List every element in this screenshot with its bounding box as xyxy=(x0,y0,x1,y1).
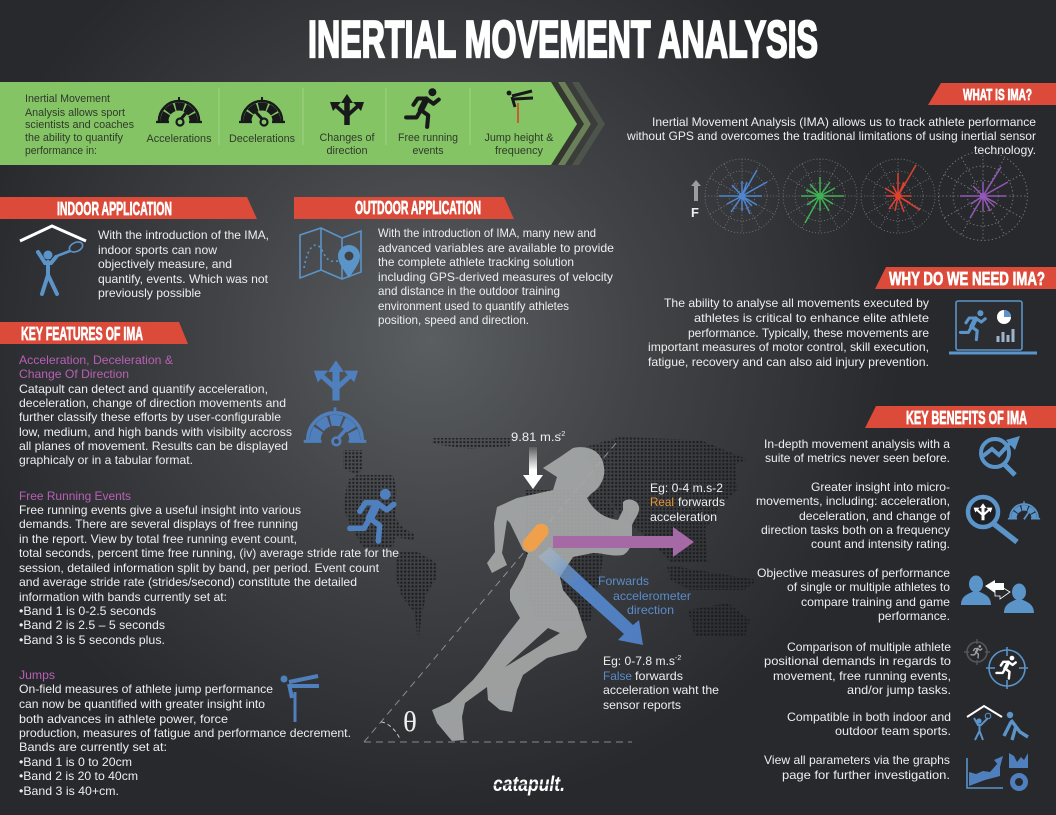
outdoor text: including GPS-derived measures of velocity xyxy=(378,270,613,284)
icon: indoor and outdoor sports xyxy=(967,706,1028,740)
banner intro text: scientists and coaches xyxy=(25,119,134,131)
benefit text: positional demands xyxy=(764,640,951,697)
false acceleration label: sensor reports xyxy=(603,698,681,712)
icon: indoor athlete xyxy=(20,226,86,294)
benefit text: movement analysis xyxy=(764,437,950,465)
outdoor text: and distance in the outdoor training xyxy=(378,284,560,298)
accelerometer direction label: accelerometer xyxy=(613,589,691,603)
banner labels: Free running xyxy=(398,132,458,144)
benefit text: micro-movements: direction tasks both on a frequency xyxy=(761,523,950,537)
icon: magnifier trend xyxy=(981,436,1020,475)
diagram: runner accelerometer xyxy=(364,430,725,742)
false acceleration label: False xyxy=(603,669,632,683)
feature: free running text: information with bands currently set at: xyxy=(19,590,227,604)
purple real acceleration arrow xyxy=(553,527,694,557)
icon: targets with runners xyxy=(964,639,1028,689)
indoor text: indoor sports can now xyxy=(98,243,217,257)
dividers xyxy=(219,88,470,145)
false acceleration label: acceleration waht the xyxy=(603,683,719,697)
benefit text: compatible: Compatible in both indoor and xyxy=(787,710,951,724)
benefit text: micro-movements: count and intensity rating. xyxy=(811,537,950,551)
banner intro text: Inertial Movement xyxy=(25,93,110,105)
benefit text: graphs: page for further investigation. xyxy=(782,768,950,782)
heading: indoor application xyxy=(0,197,257,219)
blue accelerometer arrow xyxy=(538,547,643,645)
chart: blue radar xyxy=(705,159,779,233)
banner labels: frequency xyxy=(495,145,543,157)
icon: change of direction arrows xyxy=(330,94,364,125)
chart: red radar xyxy=(861,159,935,233)
panel: key benefits xyxy=(756,406,1056,788)
heading: key features: KEY FEATURES OF IMA xyxy=(21,324,143,344)
benefit text: graphs xyxy=(764,753,950,782)
sensor xyxy=(520,521,552,555)
heading: what is IMA xyxy=(928,83,1056,105)
real acceleration label: acceleration xyxy=(650,510,717,524)
false acceleration label: forwards xyxy=(635,669,683,683)
panel: key features xyxy=(0,322,399,798)
indoor text xyxy=(98,228,269,300)
heading: indoor application: INDOOR APPLICATION xyxy=(57,199,172,219)
feature: acceleration text: Acceleration, Deceleration & xyxy=(19,353,173,367)
heading: outdoor application: OUTDOOR APPLICATION xyxy=(355,198,481,218)
why text: athletes is critical to enhance elite athlete xyxy=(694,311,929,325)
feature: acceleration text: further classify these efforts by user-configurable xyxy=(19,410,281,424)
why text xyxy=(648,296,929,369)
banner labels xyxy=(146,132,554,157)
benefit text: objective measures xyxy=(757,566,950,623)
feature: free running text: and average stride rate (strides/second) constitute the detailed xyxy=(19,575,357,589)
feature: jumps text: •Band 3 is 40+cm. xyxy=(19,784,119,798)
force arrow xyxy=(691,180,701,220)
icon: graphs xyxy=(967,753,1028,788)
benefit text: compatible: outdoor team sports. xyxy=(835,724,951,738)
benefit text: objective measures: performance. xyxy=(878,609,950,623)
icon: gauge xyxy=(304,407,366,445)
icon: direction arrows xyxy=(314,360,358,400)
panel: green capabilities banner xyxy=(0,82,605,165)
false acceleration label: -2 xyxy=(675,655,681,662)
feature: free running text: Free Running Events xyxy=(19,489,131,503)
panel: indoor application xyxy=(0,197,269,300)
benefit text: positional demands: positional demands in regards to xyxy=(764,654,951,668)
banner labels: events xyxy=(412,145,444,157)
benefit text: movement analysis: suite of metrics never seen before. xyxy=(765,451,950,465)
why text: important measures of motor control, skill execution, xyxy=(648,340,929,354)
indoor text: previously possible xyxy=(98,286,201,300)
outdoor text xyxy=(378,226,614,327)
feature: free running text: •Band 2 is 2.5 – 5 seconds xyxy=(19,618,165,632)
feature: jumps text: can now be quantified with greater insight into xyxy=(19,697,265,711)
feature: jumps text: •Band 1 is 0 to 20cm xyxy=(19,755,132,769)
real acceleration label: Real xyxy=(650,495,674,509)
benefit text: positional demands: Comparison of multiple athlete xyxy=(787,640,951,654)
what is IMA text xyxy=(626,115,1036,157)
why text: performance. Typically, these movements are xyxy=(688,326,929,340)
banner intro text: performance in: xyxy=(25,145,97,157)
outdoor text: environment used to quantify athletes xyxy=(378,299,569,313)
feature: jumps text: •Band 2 is 20 to 40cm xyxy=(19,769,138,783)
panel: why do we need IMA xyxy=(648,267,1056,369)
heading: outdoor application xyxy=(294,197,514,219)
feature: jumps text: production, measures of fatigue and performance decrement. xyxy=(19,726,351,740)
runner silhouette xyxy=(432,447,639,741)
feature: acceleration text: Change Of Direction xyxy=(19,367,129,381)
banner intro text: the ability to quantify xyxy=(25,132,123,144)
chevrons xyxy=(551,82,605,165)
accelerometer direction label: direction xyxy=(627,603,674,617)
benefit text: micro-movements: movements, including: acceleration, xyxy=(756,494,950,508)
icon: jump xyxy=(280,676,319,722)
banner intro text: Analysis allows sport xyxy=(25,107,125,119)
banner labels: Decelerations xyxy=(229,133,295,145)
accelerometer direction label xyxy=(598,574,691,617)
feature: acceleration text: graphicaly or in a tabular format. xyxy=(19,453,193,467)
feature: acceleration text: Catapult can detect and quantify acceleration, xyxy=(19,382,268,396)
outdoor text: With the introduction of IMA, many new and xyxy=(378,226,596,240)
indoor text: quantify, events. Which was not xyxy=(98,272,269,286)
outdoor text: position, speed and direction. xyxy=(378,313,529,327)
false acceleration label: Eg: 0-7.8 m.s xyxy=(603,654,675,668)
benefit text: positional demands: movement, free running events, xyxy=(773,669,951,683)
real acceleration label: forwards xyxy=(678,495,725,509)
gravity down arrow xyxy=(523,447,543,489)
banner labels: Accelerations xyxy=(146,133,212,145)
outdoor text: the complete athlete tracking solution xyxy=(378,255,574,269)
benefit text: micro-movements xyxy=(756,480,951,551)
logo: catapult: catapult. xyxy=(493,773,565,796)
feature: acceleration text xyxy=(19,353,292,467)
benefit text: positional demands: and/or jump tasks. xyxy=(847,683,951,697)
feature: free running text: total seconds, percent time free running, (iv) average stride rate for the xyxy=(19,546,399,560)
dashed geometry lines xyxy=(364,442,632,742)
what is IMA text: Inertial Movement Analysis (IMA) allows us to track athlete performance xyxy=(652,115,1036,129)
icon: acceleration gauge xyxy=(156,97,202,126)
feature: jumps text: both advances in athlete power, force xyxy=(19,712,228,726)
accelerometer direction label: Forwards xyxy=(598,574,649,588)
banner labels: Changes of xyxy=(320,132,375,144)
heading: key features xyxy=(0,322,188,344)
gravity exponent: -2 xyxy=(559,431,565,438)
benefit text: objective measures: Objective measures of performance xyxy=(757,566,950,580)
feature: free running text: demands. There are several displays of free running xyxy=(19,517,298,531)
benefit text: compatible xyxy=(787,710,951,738)
feature: free running text xyxy=(19,489,399,647)
icon: map with pin xyxy=(300,228,361,279)
benefit text: graphs: View all parameters via the graphs xyxy=(764,753,950,767)
world map dots xyxy=(343,437,757,645)
benefit text: objective measures: of single or multiple athletes to xyxy=(787,580,950,594)
false acceleration label xyxy=(603,654,719,712)
feature: free running text: •Band 1 is 0-2.5 seconds xyxy=(19,604,156,618)
icon: jump xyxy=(507,91,533,123)
feature: acceleration text: all planes of movement. Results can be displayed xyxy=(19,439,288,453)
feature: free running text: •Band 3 is 5 seconds plus. xyxy=(19,633,165,647)
gravity label: 9.81 m.s xyxy=(511,430,561,444)
icon: running xyxy=(350,489,394,541)
feature: acceleration text: low, medium, and high bands with visibilty accross xyxy=(19,425,292,439)
feature: free running text: Free running events give a useful insight into various xyxy=(19,503,301,517)
feature: jumps text: On-field measures of athlete jump performance xyxy=(19,682,273,696)
panel: outdoor application xyxy=(294,197,614,327)
icon: deceleration gauge xyxy=(239,97,285,126)
banner labels: Jump height & xyxy=(484,132,554,144)
feature: free running text: session, detailed information split by band, per period. Event count xyxy=(19,561,380,575)
banner labels: direction xyxy=(326,145,368,157)
why text: fatigue, recovery and can also aid injury prevention. xyxy=(648,355,929,369)
force arrow: F xyxy=(691,205,699,220)
banner intro text xyxy=(25,93,134,157)
indoor text: With the introduction of the IMA, xyxy=(98,228,269,242)
feature: jumps text: Bands are currently set at: xyxy=(19,740,167,754)
real acceleration label: Eg: 0-4 m.s-2 xyxy=(650,481,723,495)
banner shape xyxy=(0,82,577,165)
benefit text: micro-movements: Greater insight into micro- xyxy=(811,480,950,494)
what is IMA text: technology. xyxy=(974,143,1036,157)
chart: purple radar xyxy=(939,152,1027,240)
icon: laptop with analysis xyxy=(949,301,1037,353)
icon: runner xyxy=(406,88,439,127)
feature: jumps text: Jumps xyxy=(19,668,55,682)
benefit text: movement analysis: In-depth movement analysis with a xyxy=(764,437,950,451)
angle theta xyxy=(381,706,417,739)
icon: magnifier direction and gauge xyxy=(968,497,1040,542)
outdoor text: advanced variables are available to provide xyxy=(378,241,614,255)
feature: acceleration text: deceleration, change of direction movements and xyxy=(19,396,286,410)
panel: what is IMA xyxy=(626,83,1056,240)
feature: free running text: in the report. View by total free running event count, xyxy=(19,532,297,546)
indoor text: objectively measure, and xyxy=(98,257,232,271)
real acceleration label xyxy=(650,481,725,524)
why text: The ability to analyse all movements executed by xyxy=(664,296,929,310)
chart: green radar xyxy=(783,159,857,233)
feature: jumps text xyxy=(19,668,351,798)
angle theta: θ xyxy=(403,706,417,738)
what is IMA text: without GPS and overcomes the traditional limitations of using inertial sensor xyxy=(626,129,1036,143)
icon: compare athletes xyxy=(961,576,1034,613)
benefit text: objective measures: compare training and game xyxy=(801,595,950,609)
benefit text: micro-movements: deceleration, and change of xyxy=(799,509,951,523)
